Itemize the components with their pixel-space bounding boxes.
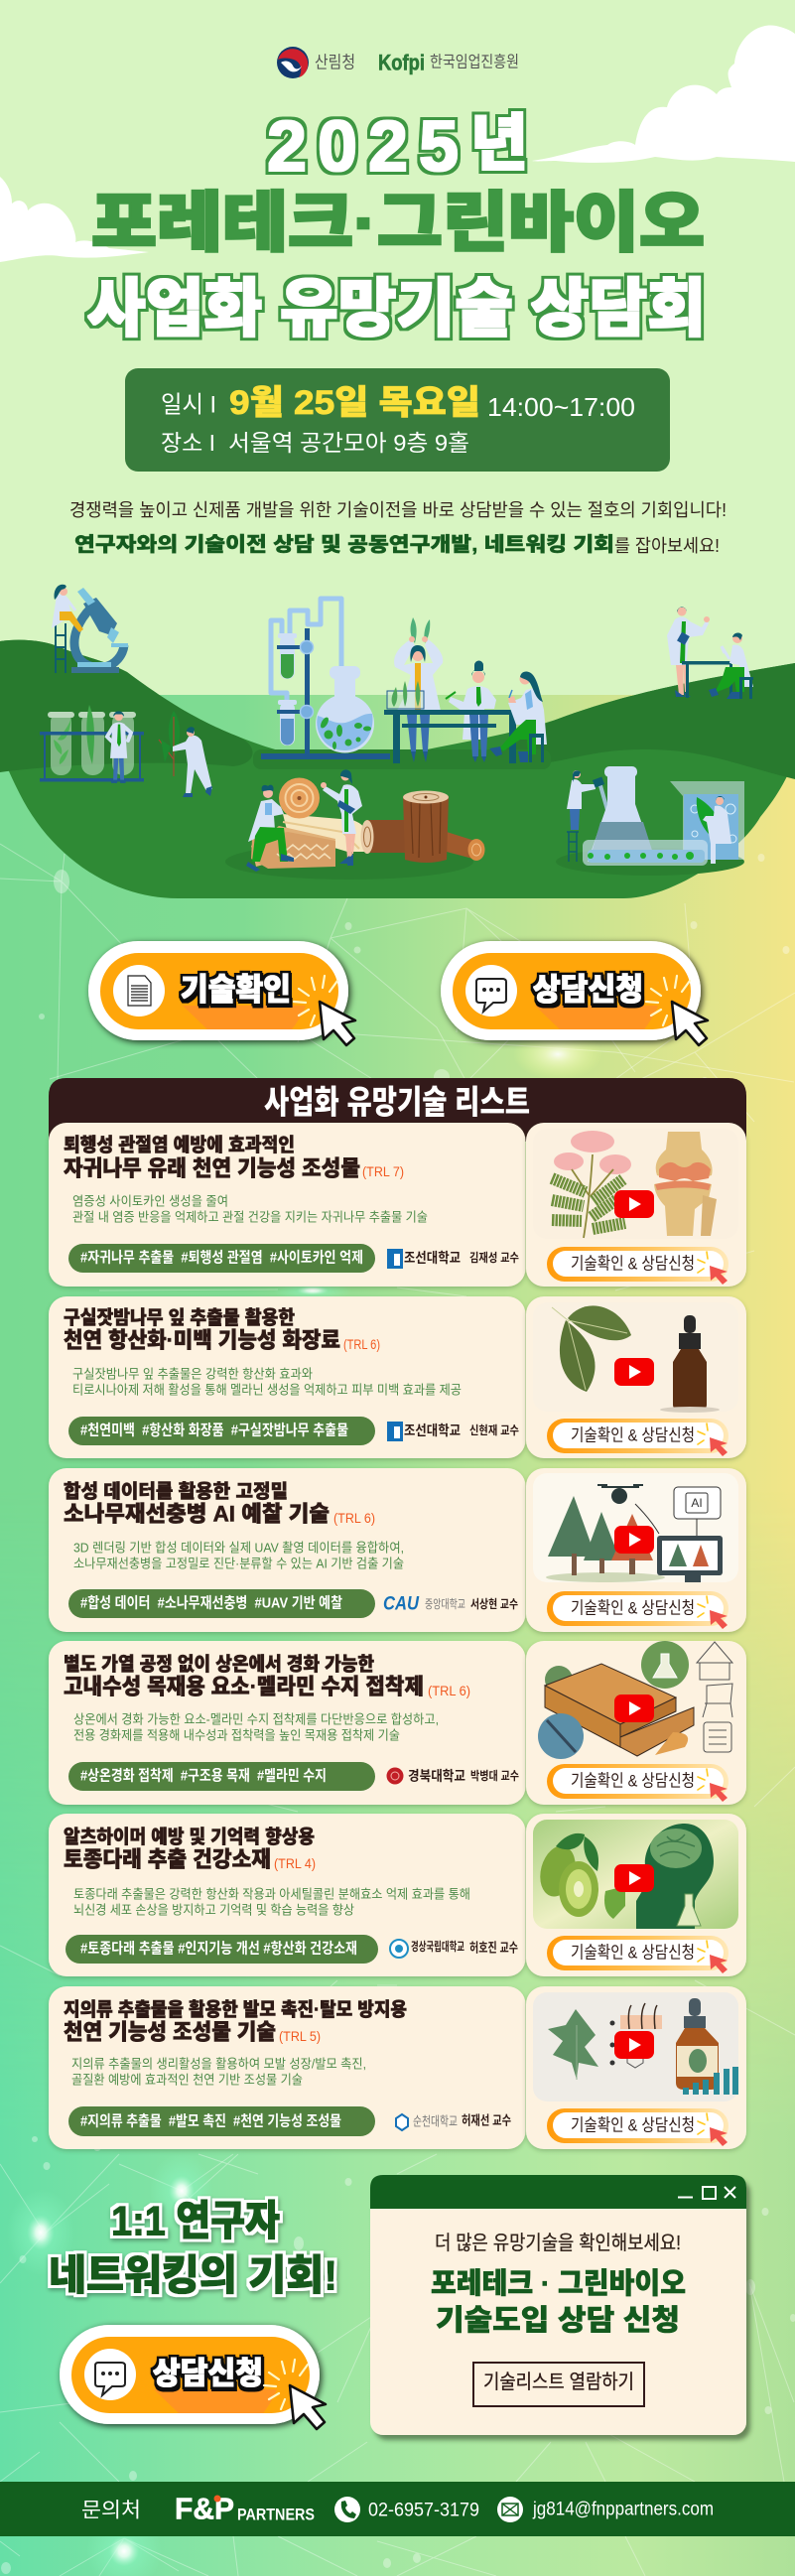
stump	[403, 790, 449, 863]
description: 구실잣밤나무 잎 추출물은 강력한 항산화 효과와	[72, 1366, 313, 1382]
standing woman	[321, 769, 362, 866]
card title: 알츠하이머 예방 및 기억력 향상용	[64, 1827, 315, 1848]
text: phone: 02-6957-3179	[368, 2500, 479, 2521]
scientist with leaf	[697, 796, 731, 864]
icon: mail	[497, 2497, 523, 2522]
description: 골질환 예방에 효과적인 천연 기반 조성물 기술	[71, 2073, 303, 2087]
icon: play badge	[614, 1526, 654, 1554]
tag pill: #지의류 추출물 #발모 촉진 #천연 기능성 조성물	[80, 2112, 341, 2130]
logo: Chung-Ang University: CAU	[383, 1594, 420, 1614]
card title: (TRL 5)	[279, 2028, 321, 2044]
logo: Chosun University	[387, 1422, 519, 1441]
cloud: top right	[532, 25, 795, 163]
description: 소나무재선충병을 고정밀로 진단·분류할 수 있는 AI 기반 검출 기술	[73, 1557, 404, 1570]
tag pill: #합성 데이터 #소나무재선충병 #UAV 기반 예찰	[80, 1594, 342, 1612]
card title: (TRL 4)	[274, 1855, 316, 1871]
right seated scientist	[489, 671, 547, 762]
logo: Kyungpook University: 박병대 교수	[470, 1769, 519, 1783]
text: email: jg814@fnppartners.com	[532, 2500, 714, 2519]
card title: 구실잣밤나무 잎 추출물 활용한	[64, 1306, 295, 1328]
standing scientist	[667, 607, 710, 697]
logo: Gyeongsang National University	[390, 1939, 518, 1958]
label: 기술확인	[181, 973, 291, 1007]
text: invitation: 더 많은 유망기술을 확인해보세요!	[435, 2232, 681, 2254]
description	[73, 1886, 470, 1918]
description: 관절 내 염증 반응을 억제하고 관절 건강을 지키는 자귀나무 추출물 기술	[72, 1209, 428, 1225]
button: check and consult: 기술확인 & 상담신청	[571, 1255, 695, 1273]
text: date label: 일시 I	[161, 391, 216, 419]
conical flask	[588, 766, 655, 862]
panel: apply window	[370, 2175, 746, 2435]
heading: 사업화 유망기술 리스트	[264, 1084, 530, 1120]
text: time: 14:00~17:00	[487, 392, 635, 422]
logo: Kyungpook University: 경북대학교	[408, 1768, 465, 1784]
logo: Gyeongsang National University: 허호진 교수	[469, 1940, 518, 1956]
illustration: conical flask and beaker with scientists	[567, 766, 744, 866]
description: 3D 렌더링 기반 합성 데이터와 실제 UAV 촬영 데이터를 융합하여,	[73, 1541, 404, 1555]
button: check and consult	[547, 1591, 729, 1629]
thumbnail: forest drone and AI: AI	[691, 1496, 703, 1510]
button: check and consult	[547, 1247, 729, 1285]
label: 상담신청	[533, 973, 643, 1007]
card 6: mugwort extract	[49, 1986, 746, 2149]
text block: intro	[69, 500, 727, 556]
table	[682, 661, 731, 665]
title: commercialization consultation: 사업화 유망기술 상담회	[87, 273, 706, 344]
card title: 퇴행성 관절염 예방에 효과적인	[64, 1134, 295, 1155]
icon: play badge	[614, 1864, 654, 1892]
card title: 토종다래 추출 건강소재	[64, 1846, 271, 1872]
tag pill	[68, 1762, 375, 1791]
footer bar	[0, 2482, 795, 2536]
illustration: lab table with three scientists	[384, 617, 547, 763]
right log	[447, 832, 484, 861]
tag pill	[68, 1244, 375, 1273]
card title	[64, 1134, 404, 1181]
icon: Korea Forest Service taegeuk	[277, 47, 309, 78]
logo: Chosun University: 조선대학교	[404, 1250, 461, 1266]
text: contact label: 문의처	[81, 2500, 141, 2521]
logo: Chosun University: 김재성 교수	[469, 1250, 519, 1265]
button: check and consult: 기술확인 & 상담신청	[571, 1425, 695, 1445]
description: 티로시나아제 저해 활성을 통해 멜라닌 생성을 억제하고 피부 미백 효과를 제공	[72, 1382, 462, 1398]
icon: play badge	[614, 1695, 654, 1722]
logo: Kyungpook University	[387, 1767, 519, 1785]
logo: Chosun University: 신현재 교수	[469, 1423, 519, 1437]
button: technology check	[88, 941, 355, 1045]
heading: one-on-one networking	[49, 2198, 337, 2299]
illustration: top right scientists	[667, 607, 753, 699]
centre scientist	[446, 661, 496, 762]
sitting scientist	[709, 633, 753, 699]
text block: intro: 연구자와의 기술이전 상담 및 공동연구개발, 네트워킹 기회	[74, 533, 614, 556]
icon: play badge	[614, 1358, 654, 1386]
illustration: microscope with scientist	[52, 585, 128, 673]
card title: 합성 데이터를 활용한 고정밀	[64, 1481, 288, 1503]
logo: Gyeongsang National University: 경상국립대학교	[411, 1939, 464, 1954]
background: lower gradient with network pattern	[0, 695, 795, 2576]
description	[73, 1541, 404, 1570]
button: consultation request	[441, 941, 708, 1045]
title: Foretech Green Bio: 포레테크·그린바이오	[91, 186, 705, 259]
button: view technology list: 기술리스트 열람하기	[483, 2371, 634, 2393]
card 4: wood adhesive	[49, 1641, 746, 1805]
heading: one-on-one networking: 1:1 연구자	[111, 2198, 280, 2243]
glass vase	[387, 681, 424, 709]
logo: Chung-Ang University: 서상현 교수	[470, 1596, 518, 1611]
logos: government agency logos	[277, 47, 519, 78]
tag pill: #자귀나무 추출물 #퇴행성 관절염 #사이토카인 억제	[80, 1249, 363, 1267]
glass tray	[583, 840, 708, 866]
card 3: pine wilt detection AI	[49, 1468, 746, 1632]
cloud: left	[0, 177, 149, 262]
thumbnail: wood boards and icons	[538, 1641, 732, 1759]
tag pill: #토종다래 추출물 #인지기능 개선 #항산화 건강소재	[80, 1940, 357, 1958]
panel: list header	[49, 1078, 746, 1142]
card title	[64, 1999, 407, 2045]
button: check and consult	[547, 1419, 729, 1456]
card title: 천연 항산화·미백 기능성 화장료	[64, 1328, 340, 1352]
icon: play badge	[614, 2031, 654, 2059]
illustration: scientist with plant	[159, 711, 212, 797]
thumbnail: plant hair bottle chart	[533, 1992, 738, 2101]
heading: application: 포레테크 · 그린바이오	[431, 2267, 686, 2300]
thumbnail: plant and knee	[533, 1129, 738, 1239]
thumbnail: kiwi and brain	[533, 1820, 738, 1929]
button: check and consult: 기술확인 & 상담신청	[571, 1771, 695, 1791]
button: view technology list	[473, 2363, 644, 2406]
description	[71, 2057, 366, 2087]
card title: 지의류 추출물을 활용한 발모 촉진·탈모 방지용	[64, 1999, 407, 2021]
heading: one-on-one networking: 네트워킹의 기회!	[49, 2251, 337, 2299]
tag pill	[68, 1589, 375, 1618]
description: 지의류 추출물의 생리활성을 활용하여 모발 성장/발모 촉진,	[71, 2057, 366, 2071]
logo: Sunchon University	[396, 2112, 511, 2130]
seated man	[246, 785, 294, 872]
logo: Chosun University	[387, 1249, 519, 1269]
window controls	[678, 2187, 735, 2199]
panel: date and venue	[125, 368, 670, 472]
test tube upper	[278, 633, 297, 679]
heading: application	[431, 2267, 686, 2337]
card title: (TRL 7)	[362, 1163, 404, 1179]
button: check and consult: 기술확인 & 상담신청	[571, 2116, 695, 2134]
card title	[64, 1654, 470, 1699]
heading: application: 기술도입 상담 신청	[436, 2304, 680, 2337]
description: 염증성 사이토카인 생성을 줄여	[72, 1193, 228, 1209]
card 1: Albizia extract	[49, 1123, 746, 1287]
title: 2025년: 2025	[267, 107, 459, 187]
round flask	[316, 666, 374, 752]
panel: date and venue: 서울역 공간모아 9층 9홀	[228, 430, 469, 456]
label: 상담신청	[153, 2357, 263, 2390]
logo: F&P Partners	[175, 2492, 315, 2525]
tag pill: #천연미백 #항산화 화장품 #구실잣밤나무 추출물	[80, 1422, 348, 1439]
button: check and consult: 기술확인 & 상담신청	[571, 1598, 695, 1618]
icon: document	[128, 976, 151, 1006]
logo: Chosun University: 조선대학교	[404, 1423, 461, 1438]
title: 2025년: 년	[470, 109, 528, 179]
icon: phone	[334, 2497, 360, 2522]
description: 상온에서 경화 가능한 요소-멜라민 수지 접착제를 다단반응으로 합성하고,	[73, 1711, 439, 1727]
tag pill	[66, 1935, 378, 1964]
text: venue: 장소 I	[161, 430, 215, 456]
logo: Chung-Ang University	[383, 1594, 518, 1614]
description: 전용 경화제를 적용해 내수성과 접착력을 높인 목재용 접착제 기술	[73, 1727, 400, 1743]
card title: 천연 기능성 조성물 기술	[64, 2019, 276, 2045]
card title: (TRL 6)	[343, 1336, 380, 1352]
illustration: test tubes with scientist	[40, 705, 144, 783]
logo: Sunchon University: 순천대학교	[413, 2114, 458, 2128]
logo: Kofpi: Kofpi	[378, 50, 425, 75]
card title: (TRL 6)	[428, 1683, 470, 1698]
wood disc	[279, 778, 320, 818]
logo: F&P Partners: F&P	[175, 2492, 234, 2525]
ladder and person on ladder	[567, 770, 607, 862]
button: check and consult: 기술확인 & 상담신청	[571, 1944, 695, 1962]
button: check and consult	[547, 1764, 729, 1802]
logo: F&P Partners: PARTNERS	[237, 2506, 315, 2523]
logo: Chung-Ang University: 중앙대학교	[425, 1597, 465, 1611]
description	[72, 1193, 428, 1225]
icon: play badge	[614, 1190, 654, 1218]
icon: speech bubble	[95, 2363, 125, 2395]
card title	[64, 1481, 375, 1527]
text block: intro: 경쟁력을 높이고 신제품 개발을 위한 기술이전을 바로 상담받을 수 있는 절호의 기회입니다!	[69, 500, 727, 520]
text block: intro: 를 잡아보세요!	[614, 536, 720, 556]
beaker	[670, 781, 744, 860]
card 5: kiwi berry extract	[49, 1814, 746, 1976]
description: 토종다래 추출물은 강력한 항산화 작용과 아세틸콜린 분해효소 억제 효과를 통해	[73, 1886, 470, 1902]
card 2: Castanopsis leaf extract	[49, 1296, 746, 1458]
tag pill	[68, 1417, 375, 1445]
table	[384, 710, 525, 763]
scientist raising plants	[394, 617, 443, 762]
thumbnail: leaf and dropper bottle	[533, 1302, 738, 1413]
card title: 고내수성 목재용 요소·멜라민 수지 접착제	[64, 1674, 424, 1699]
text: Korea Forestry Promotion Institute: 한국임업진흥원	[430, 54, 519, 71]
cardboard stack	[251, 826, 335, 869]
description	[73, 1711, 439, 1743]
text: date: 9월 25일 목요일	[229, 384, 480, 422]
icon: speech bubble	[476, 979, 506, 1012]
card title: 자귀나무 유래 천연 기능성 조성물	[64, 1155, 360, 1181]
card title	[64, 1827, 316, 1872]
description	[72, 1366, 462, 1398]
description: 뇌신경 세포 손상을 방지하고 기억력 및 학습 능력을 향상	[73, 1902, 354, 1918]
tag pill: #상온경화 접착제 #구조용 목재 #멜라민 수지	[80, 1767, 327, 1785]
button: check and consult	[547, 2108, 729, 2146]
button: bottom consultation request	[60, 2325, 326, 2429]
card title	[64, 1306, 380, 1352]
illustration: wood and logs with scientists	[246, 769, 484, 872]
horizontal log	[361, 820, 407, 854]
button: check and consult	[547, 1936, 729, 1973]
thumbnail: forest drone and AI	[533, 1473, 738, 1582]
background: light green top	[0, 0, 795, 715]
logo: Sunchon University: 허재선 교수	[462, 2112, 511, 2128]
card title: 별도 가열 공정 없이 상온에서 경화 가능한	[64, 1654, 374, 1676]
text: Korea Forest Service: 산림청	[315, 54, 355, 71]
test tube lower	[278, 700, 297, 746]
light logs	[283, 814, 369, 852]
illustration: distillation flask apparatus	[261, 599, 390, 759]
illustration: green hill	[0, 640, 795, 898]
card title: (TRL 6)	[333, 1510, 375, 1526]
tag pill	[68, 2106, 375, 2136]
card title: 소나무재선충병 AI 예찰 기술	[64, 1501, 330, 1527]
